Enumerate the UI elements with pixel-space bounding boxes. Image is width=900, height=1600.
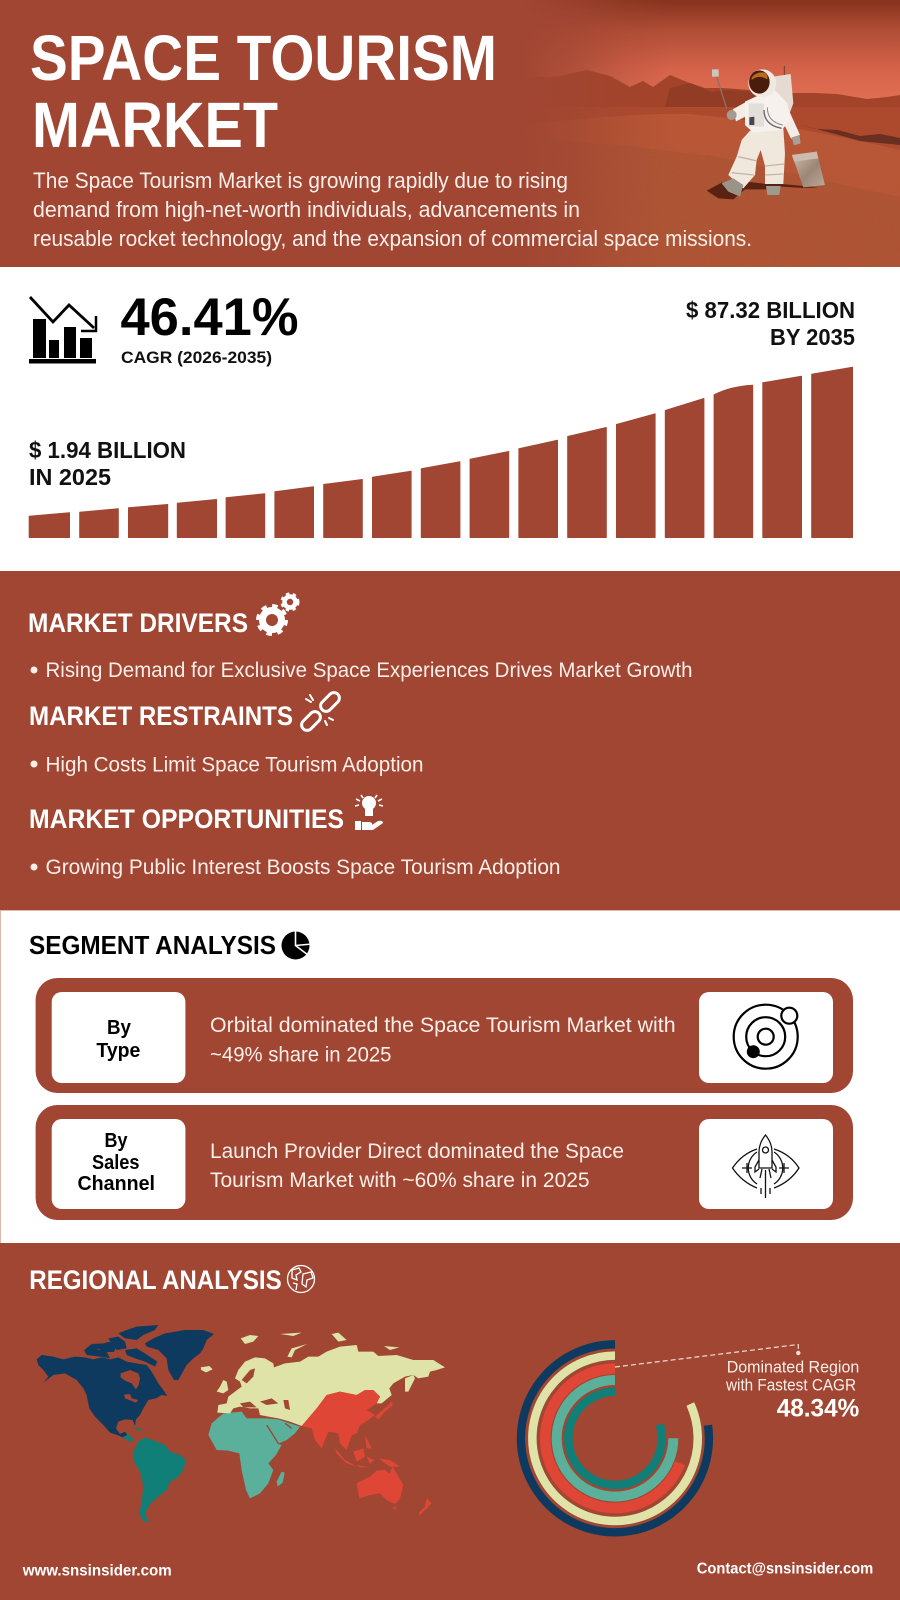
radial chart [521,1344,709,1532]
icon: broken chain [299,690,342,733]
panel: regional analysis [0,1243,900,1600]
forecast value [686,297,855,350]
title: SPACE TOURISM [30,22,497,94]
intro text: reusable rocket technology, and the expansion of commercial space missions. [33,226,752,251]
region: africa and middle east [208,1412,300,1498]
heading: segment analysis: SEGMENT ANALYSIS [29,930,276,960]
icon: bar chart with trend arrow [29,296,96,364]
label box: by type: Type [96,1040,140,1062]
label box: by type [52,992,185,1083]
image: astronaut on Mars [520,0,900,267]
region: asia pacific [302,1390,432,1515]
label box: by sales channel [52,1119,185,1209]
label box: by sales channel: Sales [92,1152,140,1174]
icon: bulb in hand [355,795,383,830]
segment card: by sales channel [36,1105,853,1220]
forecast value: BY 2035 [770,324,855,350]
opportunity text: Growing Public Interest Boosts Space Tourism Adoption [46,856,560,879]
callout leader line [615,1344,800,1367]
callout text: with Fastest CAGR [725,1377,856,1395]
astronaut [707,66,825,199]
channel text: Tourism Market with ~60% share in 2025 [210,1169,590,1192]
callout text [725,1359,859,1423]
callout text: Dominated Region [727,1359,859,1377]
base value: IN 2025 [29,464,111,490]
heading: market opportunities: MARKET OPPORTUNITIES [29,804,344,834]
CAGR value: 46.41% [120,288,298,347]
base value: $ 1.94 BILLION [29,437,186,463]
icon box: rocket and eye [699,1119,833,1209]
driver text: Rising Demand for Exclusive Space Experiences Drives Market Growth [46,659,692,682]
title [30,22,497,161]
channel text: Launch Provider Direct dominated the Space [210,1140,624,1163]
callout text: 48.34% [777,1395,859,1423]
forecast value: $ 87.32 BILLION [686,297,855,323]
website: www.snsinsider.com [22,1563,172,1580]
contact: Contact@snsinsider.com [697,1560,873,1577]
world map [37,1325,445,1522]
heading: market restraints: MARKET RESTRAINTS [29,701,293,731]
intro text [33,168,752,251]
heading: market drivers: MARKET DRIVERS [28,608,248,638]
icon: gears [258,594,298,634]
label box: by sales channel: By [104,1130,128,1152]
segment card: by type [36,978,853,1093]
bar chart: growth [29,367,852,538]
panel: header [0,0,900,267]
type text: Orbital dominated the Space Tourism Market with [210,1014,676,1037]
panel: market size [29,288,855,538]
region: europe and northern asia [201,1333,445,1426]
icon: pie chart [282,930,312,960]
type text: ~49% share in 2025 [210,1044,392,1067]
region: south america [123,1427,186,1522]
title: MARKET [32,89,278,161]
channel text [210,1140,624,1192]
heading: regional analysis: REGIONAL ANALYSIS [29,1265,282,1295]
panel: market dynamics [0,571,900,910]
CAGR label: CAGR (2026-2035) [121,349,272,367]
type text [210,1014,676,1067]
restraint text: High Costs Limit Space Tourism Adoption [46,754,424,777]
icon: globe [288,1266,314,1292]
intro text: demand from high-net-worth individuals, advancements in [33,197,580,222]
region: north america [37,1325,214,1437]
panel: segment analysis [29,930,853,1220]
label box: by sales channel: Channel [78,1173,155,1195]
icon box: orbit [699,992,833,1083]
label box: by type: By [107,1017,132,1039]
intro text: The Space Tourism Market is growing rapidly due to rising [33,168,568,193]
base value [29,437,186,490]
